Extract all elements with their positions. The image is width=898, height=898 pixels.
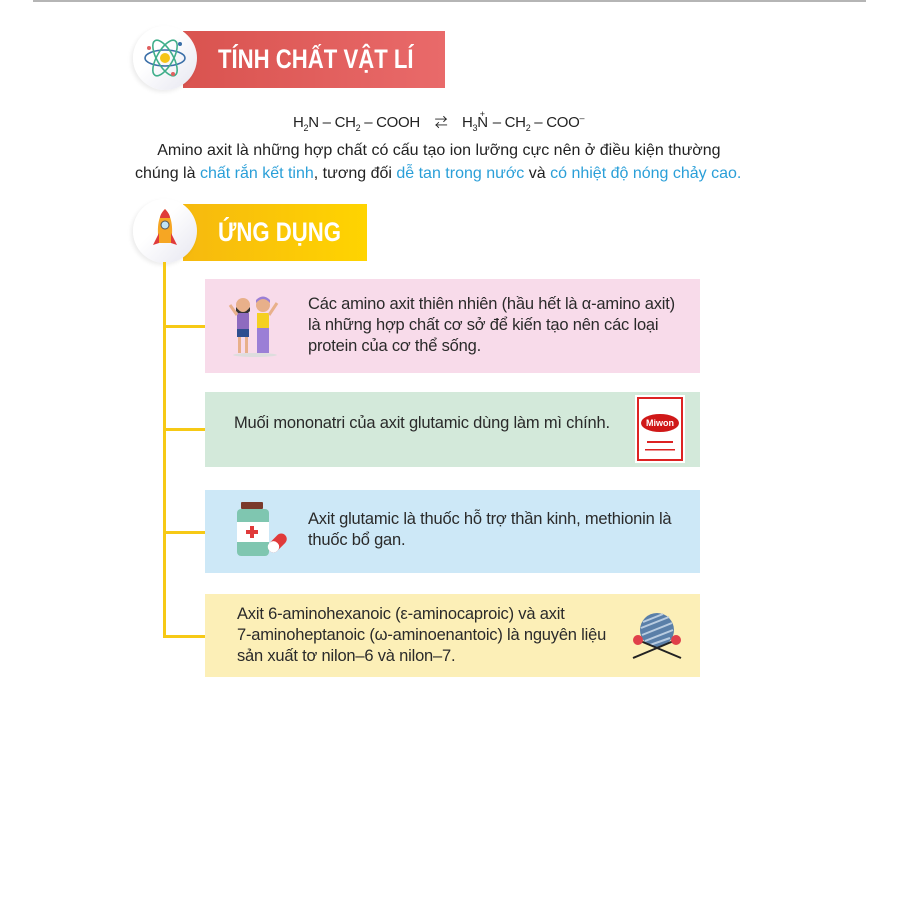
paragraph [135, 142, 741, 182]
paragraph: Amino axit là những hợp chất có cấu tạo ion lưỡng cực nên ở điều kiện thường [157, 142, 721, 159]
icon: miwon packet: Miwon [646, 418, 674, 428]
banner yellow [183, 204, 367, 261]
formula: ⇄ [435, 115, 447, 130]
banner red: TÍNH CHẤT VẬT LÍ [218, 44, 414, 74]
text: protein của cơ thể sống. [308, 337, 481, 355]
top rule [33, 0, 866, 2]
banner yellow: ỨNG DỤNG [218, 217, 341, 247]
panel: nylon [205, 594, 700, 677]
banner red [183, 31, 445, 88]
panel: monosodium glutamate [205, 392, 700, 467]
connector tree [163, 262, 205, 638]
paragraph: chúng là chất rắn kết tinh, tương đối dễ tan trong nước và có nhiệt độ nóng chảy cao. [135, 165, 741, 182]
text: là những hợp chất cơ sở để kiến tạo nên các loại [308, 316, 658, 334]
text: Axit glutamic là thuốc hỗ trợ thần kinh, methionin là [308, 510, 671, 528]
text [308, 295, 675, 355]
panel: medicine [205, 490, 700, 573]
text: sản xuất tơ nilon–6 và nilon–7. [237, 647, 455, 665]
text: Muối mononatri của axit glutamic dùng làm mì chính. [234, 414, 610, 432]
formula: H2N – CH2 – COOH H3N+ – CH2 – COO– [293, 109, 584, 133]
icon: atom [133, 26, 197, 90]
text: 7-aminoheptanoic (ω-aminoenantoic) là nguyên liệu [237, 626, 606, 644]
heading: ung dung [131, 204, 367, 265]
icon: people [228, 296, 278, 357]
panel: proteins [205, 279, 700, 373]
icon: medicine bottle [237, 502, 287, 556]
text [237, 605, 606, 665]
text [308, 509, 672, 549]
text: Axit 6-aminohexanoic (ε-aminocaproic) và axit [237, 605, 565, 623]
text: Các amino axit thiên nhiên (hầu hết là α-amino axit) [308, 295, 675, 313]
text: thuốc bổ gan. [308, 531, 405, 549]
icon: rocket [133, 199, 197, 263]
heading: tinh chat vat li [131, 31, 445, 92]
icon: miwon packet [635, 395, 685, 463]
icon: yarn ball [632, 613, 682, 659]
